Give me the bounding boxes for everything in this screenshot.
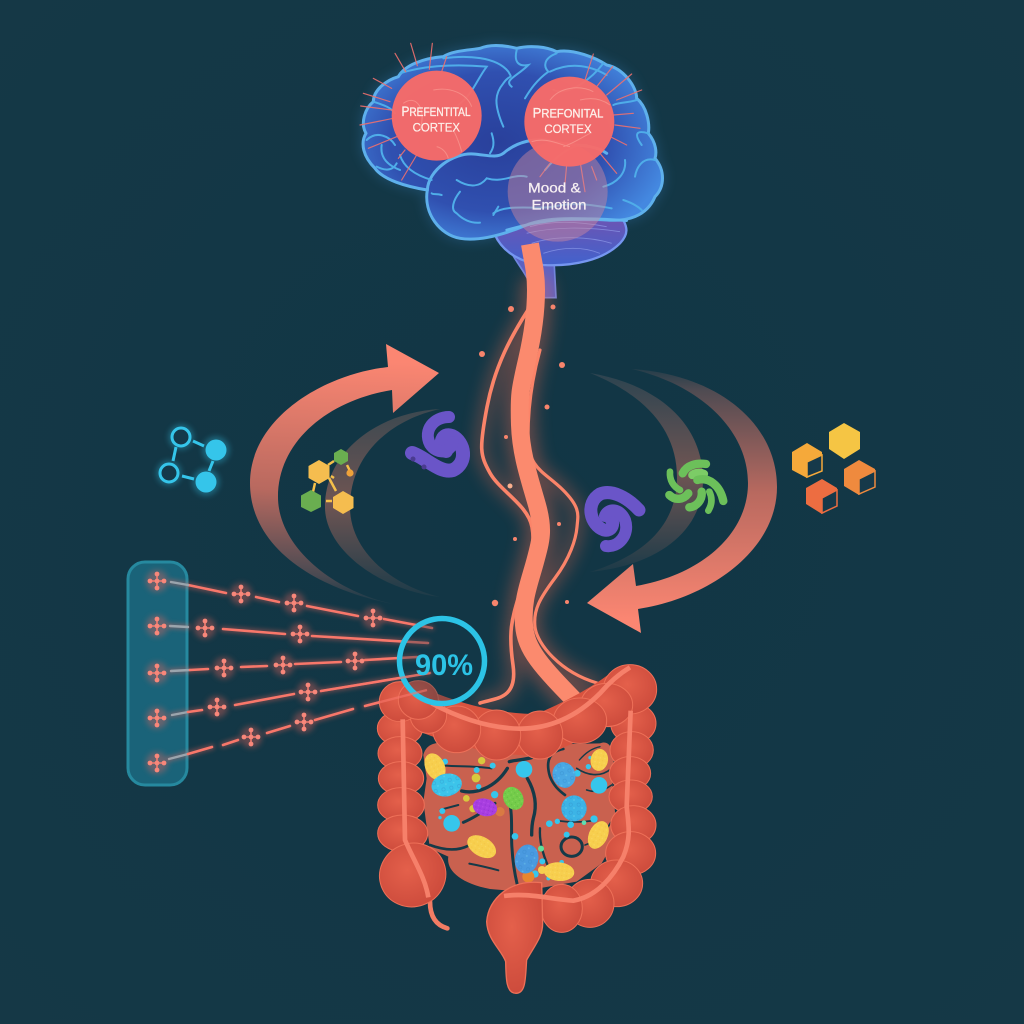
- main nerve trunk: [520, 244, 580, 706]
- brainstem: [510, 250, 556, 298]
- line starts inside capsule: [169, 582, 190, 759]
- neural spark lines: [360, 43, 642, 192]
- region: mood and emotion: Emotion: [531, 197, 586, 212]
- blue round bacteria: [429, 759, 587, 876]
- purple bacterium: [471, 796, 499, 819]
- callout: 90 percent: [321, 618, 484, 706]
- curved arrow: gut to brain (left): [250, 344, 439, 604]
- callout: 90 percent: 90%: [415, 649, 473, 682]
- icon: hexagon molecule cluster: [301, 449, 354, 514]
- region: mood and emotion: [508, 142, 608, 242]
- panel: serotonin source capsule: [128, 562, 187, 785]
- icon: blue molecule network: [160, 428, 226, 492]
- small intestine: [423, 742, 617, 892]
- yellow rod bacteria: [420, 748, 613, 882]
- serotonin signal lines: [169, 582, 432, 759]
- icon: purple spiral bacterium left: [410, 417, 463, 471]
- region: right prefrontal cortex: PREFONITAL: [533, 104, 604, 120]
- region: mood and emotion: Mood &: [528, 180, 581, 195]
- icon: purple spiral bacterium right: [591, 493, 639, 546]
- left thin nerve fibre: [480, 310, 533, 703]
- gut microbes: [420, 748, 613, 883]
- rectum: [487, 882, 543, 993]
- vagus nerve: [480, 244, 597, 706]
- sulci: [367, 50, 655, 230]
- nerve glow: [480, 290, 597, 706]
- region: left prefrontal cortex: PREFENTITAL: [401, 103, 471, 119]
- icon: green swirl bacterium: [669, 464, 723, 511]
- right thin nerve fibre: [528, 350, 597, 683]
- serotonin markers: [146, 570, 384, 774]
- line segments: [188, 585, 432, 745]
- region: right prefrontal cortex: CORTEX: [544, 122, 592, 136]
- region: right prefrontal cortex: [524, 77, 614, 167]
- ascending colon: [371, 711, 455, 916]
- crescent shadow: left: [325, 409, 440, 597]
- region: left prefrontal cortex: [392, 71, 482, 161]
- brain glow: [363, 45, 662, 239]
- cerebellum: [495, 220, 626, 265]
- appendix: [430, 902, 447, 928]
- descending colon: [541, 703, 656, 932]
- intestinal fold gaps: [430, 747, 615, 885]
- brain: [360, 43, 662, 298]
- transverse colon: [379, 665, 657, 760]
- curved arrow: brain to gut (right): [587, 369, 777, 633]
- region: left prefrontal cortex: CORTEX: [413, 120, 460, 134]
- cerebrum: [363, 45, 662, 239]
- green bacterium: [499, 783, 528, 814]
- digestive tract: [371, 665, 657, 993]
- temporal lobe outline: [427, 140, 607, 190]
- colon band: [403, 667, 631, 901]
- line glow: [169, 582, 432, 759]
- small particles: [438, 756, 607, 880]
- crescent shadow: right: [590, 373, 703, 572]
- icon: metabolite cubes: [792, 423, 875, 514]
- signal particles: [479, 304, 569, 606]
